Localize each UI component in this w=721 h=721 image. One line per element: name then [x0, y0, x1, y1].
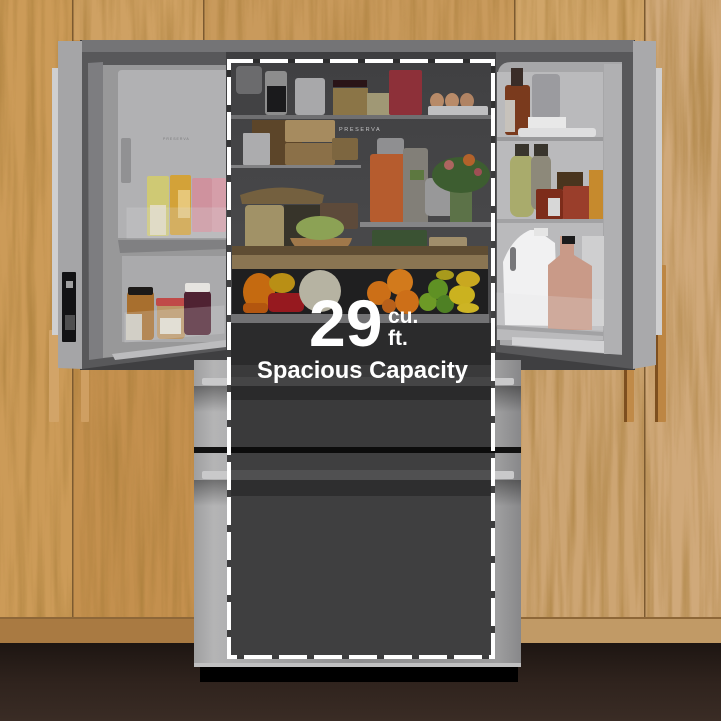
lower drawer handle [202, 470, 514, 480]
right door frame [496, 52, 633, 369]
left door gasket [88, 62, 104, 360]
crisper drawers [232, 269, 488, 315]
right door bottom lip [512, 337, 604, 353]
preserva badge: PRESERVA [339, 127, 381, 133]
top strip [82, 40, 634, 52]
left door outer steel [58, 41, 82, 369]
cover badge: PRESERVA [163, 137, 190, 141]
right door back panel [497, 72, 603, 340]
clear bin [127, 208, 226, 238]
left door [52, 41, 226, 369]
lower clear bin [125, 306, 224, 342]
dairy compartment cover [118, 70, 226, 238]
control display panel [62, 272, 76, 342]
dashed capacity outline [229, 61, 493, 657]
bottom door shelf [497, 325, 603, 336]
flowers in vase [425, 154, 490, 225]
second shelf items [243, 120, 358, 165]
lower freezer drawer [194, 453, 521, 667]
cover latch [121, 138, 131, 183]
cans in left bin [147, 175, 226, 236]
upper interior back wall [231, 63, 491, 323]
lower interior dark [231, 323, 491, 365]
wood door pulls [49, 265, 666, 422]
divider shelf [118, 240, 226, 253]
wood shelf [232, 246, 488, 269]
top shelf [229, 115, 494, 119]
capacity figure: 29 cu. ft. [309, 286, 418, 360]
left door frame [82, 52, 226, 369]
refrigerator foot shadow [200, 666, 518, 682]
second shelf [231, 165, 361, 168]
upper freezer drawer [194, 360, 521, 453]
lower compartment [122, 256, 226, 342]
capacity figure: 29 cu. ft.: 29 [309, 286, 382, 360]
orange pitcher and carafe [370, 138, 428, 225]
bottom door shelf items [503, 228, 604, 330]
capacity figure: 29 cu. ft.: cu. [388, 305, 418, 328]
left door side handle strip [52, 68, 58, 335]
bottom door bin [497, 293, 603, 330]
jars in lower bin [126, 283, 211, 340]
top door shelf [497, 137, 603, 141]
right door outer steel [633, 41, 656, 369]
right door lining [498, 62, 622, 355]
freezer drawer darkening [227, 365, 495, 656]
middle door shelf items [510, 144, 603, 220]
third shelf items [240, 188, 467, 255]
dark floor [0, 643, 721, 721]
upper drawer handle [202, 377, 514, 386]
left door bottom lip [112, 340, 226, 360]
interior backing [227, 59, 495, 659]
fridge back frame [80, 40, 635, 370]
top shelf items [236, 66, 488, 116]
middle door shelf [497, 219, 603, 223]
right handle strip [656, 68, 662, 335]
top door shelf items [505, 68, 596, 137]
left door inner lining [103, 65, 226, 358]
crisper tray lip [231, 314, 489, 323]
third shelf [360, 222, 493, 227]
fridge interior, darkened capacity zone [227, 59, 495, 659]
right door [496, 41, 662, 369]
capacity figure: 29 cu. ft.: ft. [388, 327, 408, 350]
right door gasket [604, 64, 622, 354]
caption: Spacious Capacity: Spacious Capacity [257, 357, 469, 384]
